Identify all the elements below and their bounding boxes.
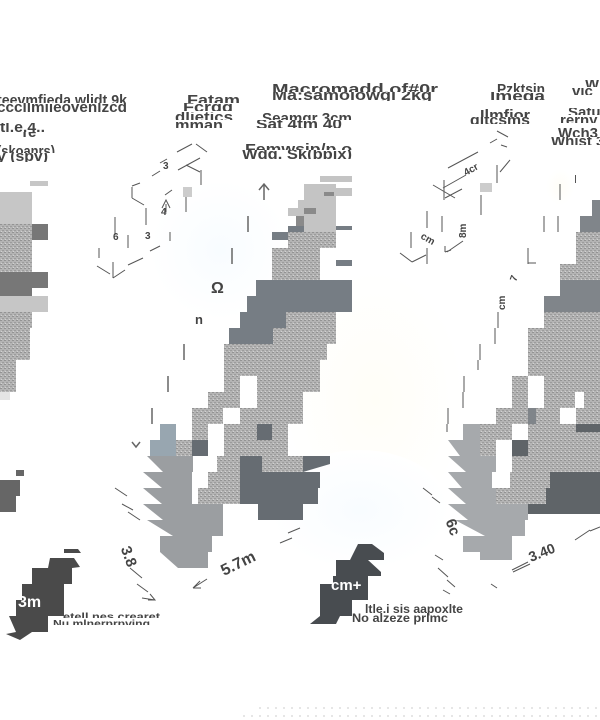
right horse dark rocker base xyxy=(512,424,600,514)
right horse neck and body xyxy=(480,232,600,504)
dimension: center height: n xyxy=(195,312,203,327)
heading: center-right spec text: Seamgr 3cm xyxy=(262,110,352,127)
heading: center-right spec text: Ma:samolowgl 2kg xyxy=(272,87,432,104)
right horse saddle and mane xyxy=(528,200,600,424)
heading: right spec text: lmega xyxy=(490,88,546,105)
dimension: left depth xyxy=(115,488,155,600)
heading: center-left spec text: Fatam xyxy=(187,92,240,109)
dimension: right width: 3.40 xyxy=(526,540,558,565)
badge: right size badge: cm+ xyxy=(331,577,362,594)
dimension: right height: cm xyxy=(497,295,508,310)
note: left footnote xyxy=(53,612,161,630)
badge: left size badge xyxy=(6,549,81,640)
heading: right spec text xyxy=(470,76,600,150)
dimension: right height xyxy=(447,175,576,432)
note: left footnote: Nu mlnerprpving xyxy=(53,619,150,630)
center horse head and mane xyxy=(288,176,352,232)
package label xyxy=(480,183,492,192)
heading: left spec text: tl.e.4.. xyxy=(0,119,45,136)
diagram: right package box: cm xyxy=(418,231,437,248)
heading: right spec text: Wch3 xyxy=(558,125,598,142)
center horse rocker xyxy=(150,424,176,456)
diagram: right package box: 8m xyxy=(458,223,469,238)
heading: right spec text: rerny xyxy=(560,112,598,129)
dimension: center height: Ω xyxy=(211,280,224,297)
right horse xyxy=(448,200,600,560)
dimension: left depth: 3.8 xyxy=(117,544,140,569)
heading: center-right spec text: Macromadd.of#0r xyxy=(272,81,438,98)
note: right footnote: ltle.i sis aapoxlte xyxy=(365,604,463,616)
heading: right spec text: vic xyxy=(572,83,593,100)
center horse xyxy=(143,176,352,568)
center horse neck and body xyxy=(176,232,336,504)
box dimensions: 4 xyxy=(161,207,167,218)
heading: right spec text: ditcsms xyxy=(470,112,530,129)
diagram: left package box: 6 xyxy=(113,232,119,243)
center horse dark rocker base xyxy=(192,424,330,520)
heading: left spec text: cccllmiieovenlzcd xyxy=(0,99,127,116)
dimension: left width: 5.7m xyxy=(218,548,259,580)
diagram: left package box xyxy=(97,144,207,278)
heading: center-right spec text: Sat 4tm 40 xyxy=(256,116,342,133)
background tints xyxy=(150,169,574,570)
footer dotted strip xyxy=(240,702,600,718)
heading: center-left spec text: mman xyxy=(175,117,223,134)
box dimensions: 4cr xyxy=(462,162,481,179)
heading: center-right spec text: Wdg. Sk(bpix) xyxy=(242,146,352,163)
diagram: left package box: 3 xyxy=(163,161,169,172)
heading: left spec text: Tee xyxy=(20,124,45,141)
package label xyxy=(183,187,192,197)
dimension: right width xyxy=(491,527,600,588)
diagram: left package box: 3 xyxy=(145,231,151,242)
note: right footnote xyxy=(352,604,463,625)
heading: left spec text xyxy=(0,92,128,165)
center horse saddle xyxy=(229,226,352,344)
heading: center-left spec text: dlietics xyxy=(175,109,233,126)
box height arrow xyxy=(162,200,170,212)
heading: right spec text: Ilmfior xyxy=(480,107,530,124)
heading: right spec text: Satu xyxy=(568,104,600,121)
badge: right size badge xyxy=(310,544,384,624)
heading: center-right spec text: Femwsip/p o xyxy=(245,141,352,158)
note: left footnote: etell nes crearet xyxy=(63,612,161,623)
dimension: right depth xyxy=(423,488,463,594)
heading: center-right spec text xyxy=(242,81,438,163)
dimension: right height: 7 xyxy=(508,274,521,283)
diagram: right package box xyxy=(400,131,510,264)
dimension: left width xyxy=(193,528,300,588)
dimension: center height xyxy=(132,184,269,447)
note: right footnote: No alzeze prlmc xyxy=(352,613,449,625)
heading: center-left spec text xyxy=(175,92,240,134)
left horse fragment xyxy=(0,181,48,512)
right horse rocker xyxy=(448,424,528,560)
heading: center-left spec text: Fcrqq xyxy=(183,99,233,116)
dimension: right depth: 6c xyxy=(442,516,463,538)
badge: left size badge: 3m xyxy=(18,594,41,611)
